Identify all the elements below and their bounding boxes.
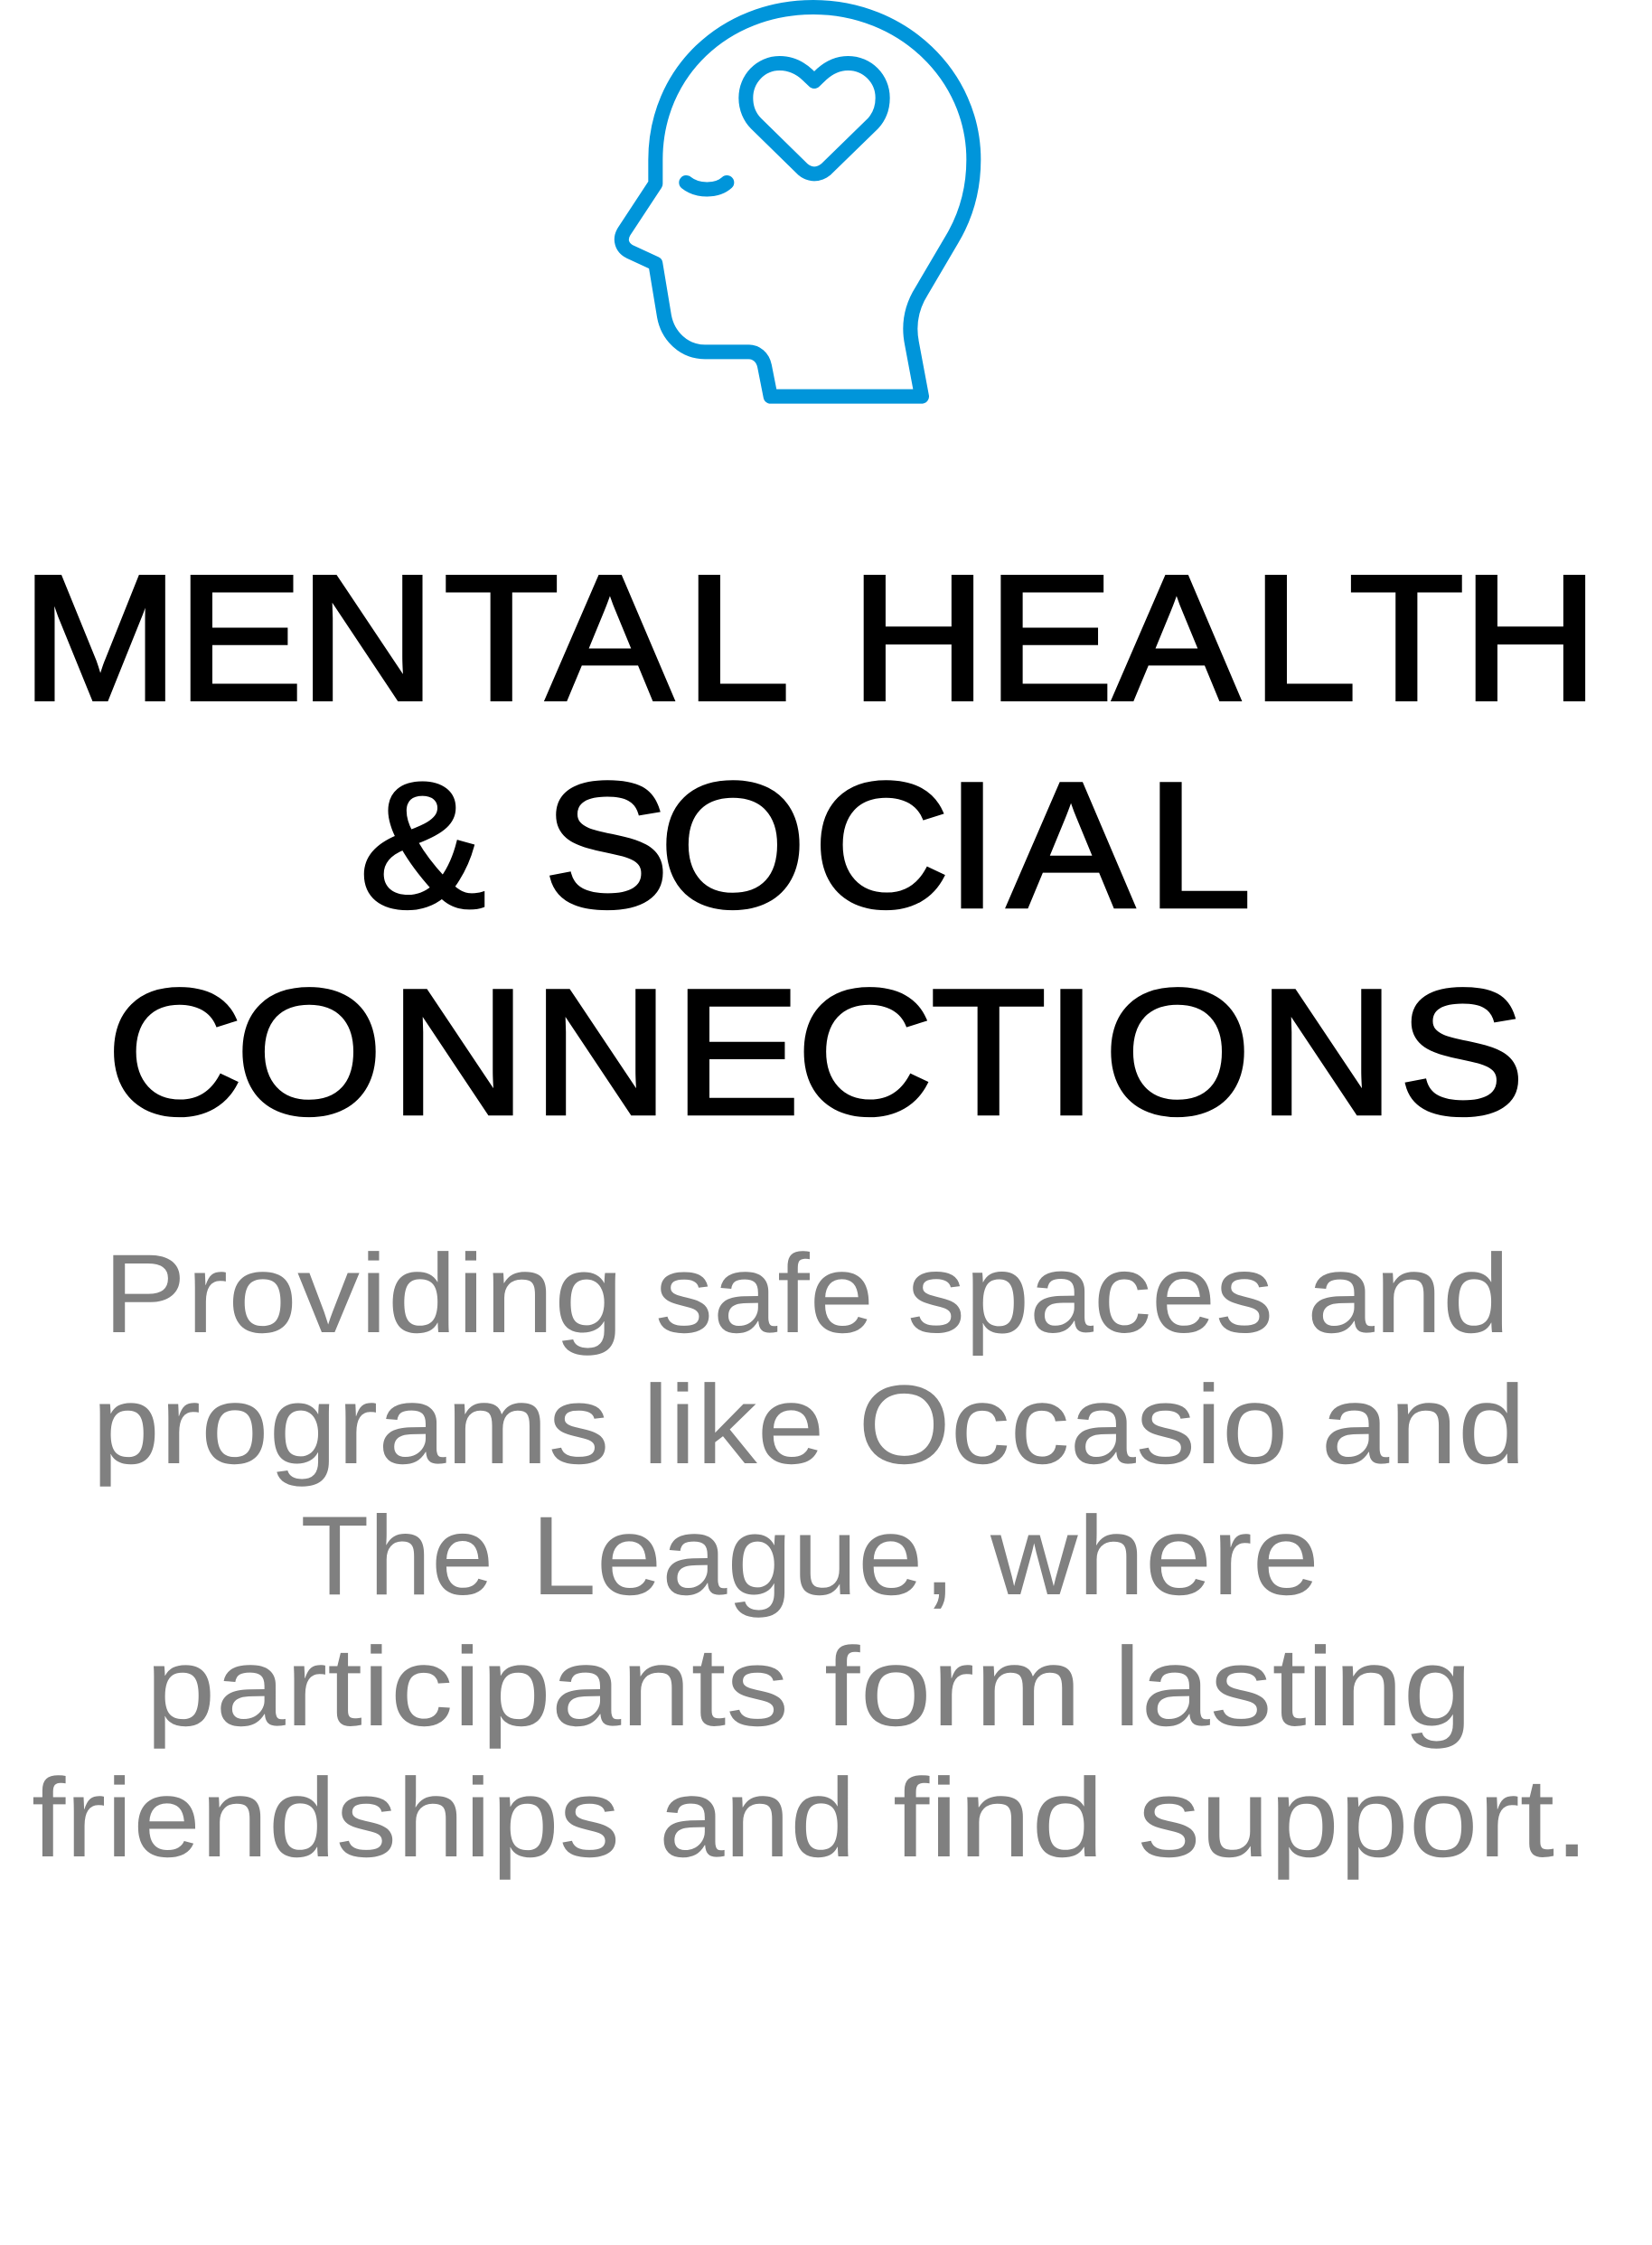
body text: support. — [1138, 1756, 1589, 1881]
body text: League, — [531, 1494, 956, 1619]
body text: find — [893, 1756, 1104, 1881]
body text: and — [1307, 1232, 1510, 1357]
heading: SOCIAL — [543, 746, 1252, 945]
body text: safe — [655, 1232, 874, 1357]
heading: & — [360, 746, 485, 945]
body text: and — [1321, 1363, 1526, 1488]
icon: head profile with heart — [622, 7, 973, 397]
body text: lasting — [1113, 1625, 1472, 1750]
body text: The — [300, 1494, 493, 1619]
body text: where — [990, 1494, 1319, 1619]
heading: MENTAL — [22, 539, 790, 737]
body text: participants — [145, 1625, 789, 1750]
body text: form — [824, 1625, 1082, 1750]
icon part: head outline — [622, 7, 973, 397]
icon part: heart — [746, 63, 883, 174]
body text: and — [659, 1756, 856, 1881]
icon part: closed eye — [686, 183, 727, 189]
body text: Occasio — [858, 1363, 1288, 1488]
body text: Providing — [103, 1232, 624, 1357]
heading: CONNECTIONS — [107, 953, 1525, 1152]
body text: like — [643, 1363, 825, 1488]
body text: programs — [92, 1363, 609, 1488]
body text: friendships — [32, 1756, 620, 1881]
body text — [32, 1232, 1589, 1881]
body text: spaces — [907, 1232, 1273, 1357]
heading: HEALTH — [850, 539, 1599, 737]
heading — [22, 539, 1599, 1152]
